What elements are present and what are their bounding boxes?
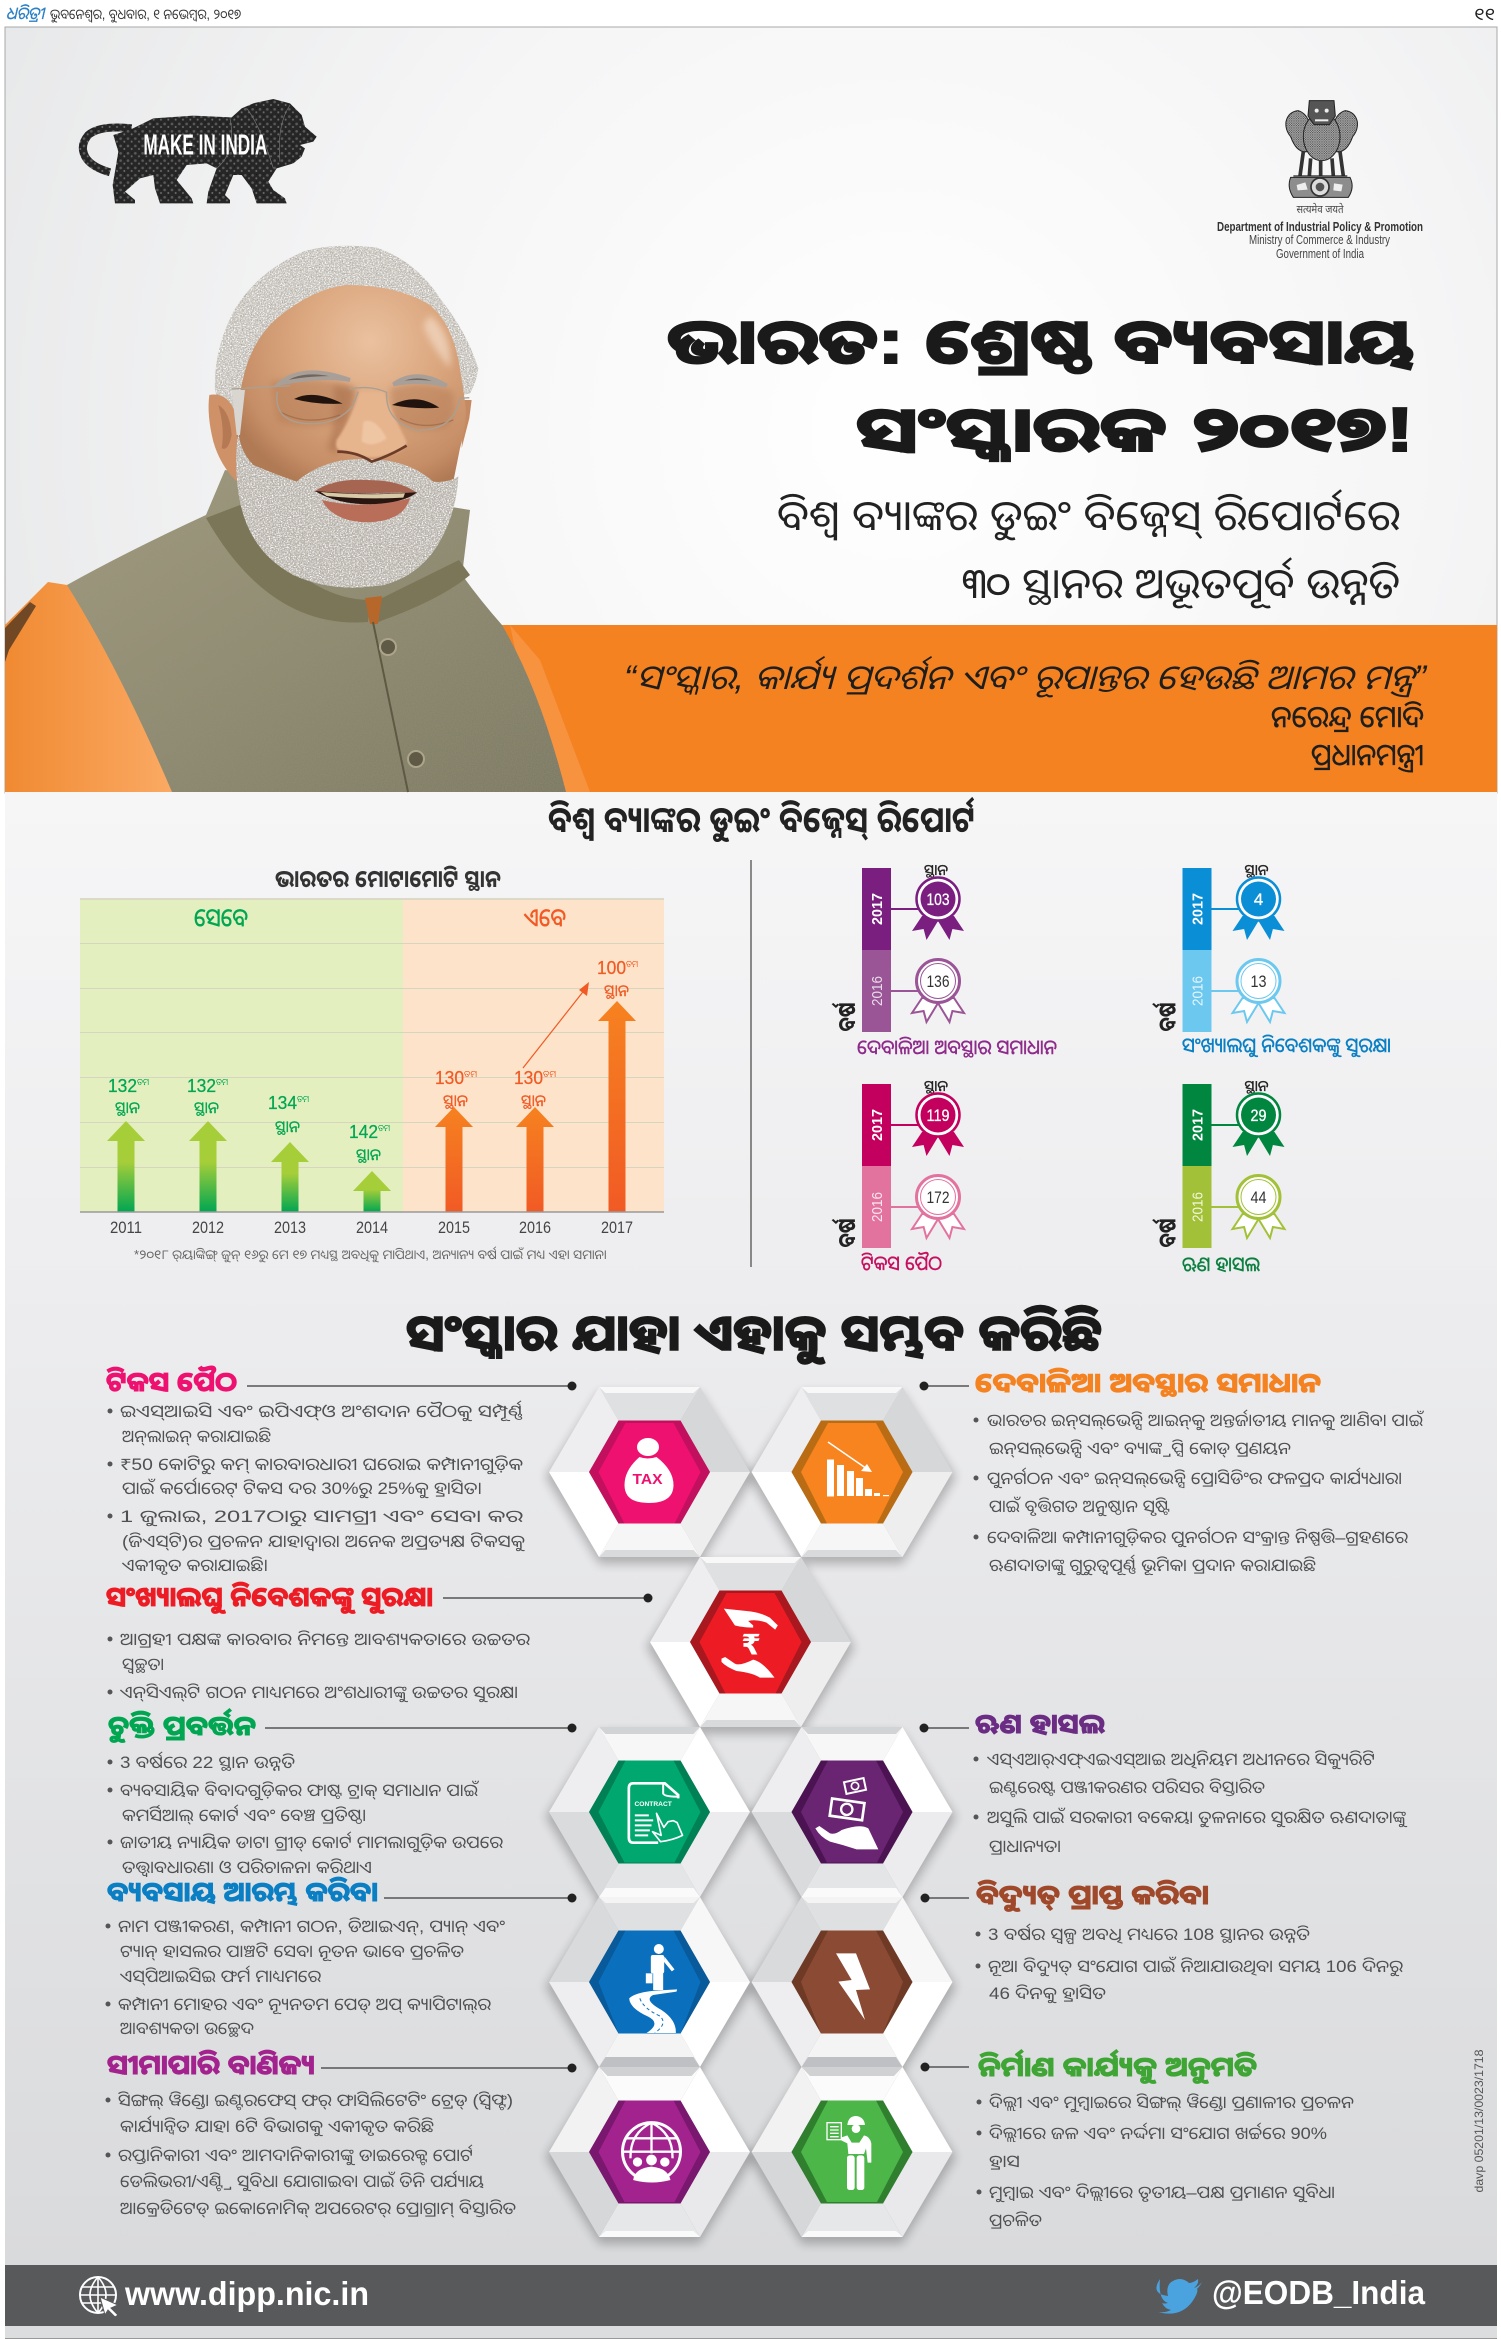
- rank card: resolving insolvency: ସ୍ଥାନ: [924, 862, 948, 879]
- bullet list: ଏକୀକୃତ କରାଯାଇଛି।: [121, 1556, 268, 1576]
- logo: Make in India lion: [83, 99, 317, 203]
- rank card: resolving insolvency: 136: [926, 972, 950, 991]
- centre lion head: [1308, 101, 1335, 125]
- website: www.dipp.nic.in: [124, 2275, 369, 2312]
- rank labels now: ସ୍ଥାନ: [604, 983, 629, 1000]
- page number: ୧୧: [1474, 5, 1495, 24]
- vest placket and buttons: [373, 622, 408, 792]
- orange band background: [495, 625, 1497, 792]
- chart title: ଭାରତର ମୋଟାମୋଟି ସ୍ଥାନ: [275, 865, 501, 893]
- bullet list: ସ୍ୱଚ୍ଛତା: [122, 1655, 164, 1675]
- rank card: resolving insolvency: ବର୍ଷ: [831, 1002, 861, 1032]
- bullet list: ପ୍ରାଧାନ୍ୟତା: [989, 1837, 1061, 1856]
- dateline: ଭୁବନେଶ୍ୱର, ବୁଧବାର, ୧ ନଭେମ୍ବର, ୨୦୧୭: [50, 6, 241, 23]
- bullet list: କମର୍ସିଆଲ୍ କୋର୍ଟ ଏବଂ ବେଞ୍ଚ ପ୍ରତିଷ୍ଠା: [122, 1804, 366, 1825]
- section heading: ଦେବାଳିଆ ଅବସ୍ଥାର ସମାଧାନ: [975, 1368, 1321, 1398]
- rank card: protecting minority investors: 13: [1250, 972, 1266, 991]
- section heading: ବିଦ୍ୟୁତ୍ ପ୍ରାପ୍ତ କରିବା: [976, 1880, 1209, 1912]
- chart footnote: *୨୦୧୮ ର୍‍ୟାଙ୍କିଙ୍ଗ୍ ଜୁନ୍ ୧୬ରୁ ମେ ୧୭ ମଧ୍ୟସ୍ଥ ଅବଧିକୁ ମାପିଥାଏ, ଅନ୍ୟାନ୍ୟ ବର୍ଷ ପାଇଁ ମଧ୍ୟ ଏହା ସମାନ।: [134, 1246, 607, 1262]
- bullet list: [108, 1751, 503, 1878]
- bullet list: ମୁମ୍ବାଇ ଏବଂ ଦିଲ୍ଲୀରେ ତୃତୀୟ–ପକ୍ଷ ପ୍ରମାଣନ ସୁବିଧା: [989, 2183, 1335, 2203]
- rank labels now: 100: [597, 958, 626, 978]
- heading: reforms that made this possible: ସଂସ୍କାର ଯାହା ଏହାକୁ ସମ୍ଭବ କରିଛି: [406, 1305, 1102, 1364]
- bullet list: ପୁନର୍ଗଠନ ଏବଂ ଇନ୍‌ସଲ୍‌ଭେନ୍ସି ପ୍ରୋସିଡିଂର ଫଳପ୍ରଦ କାର୍ଯ୍ୟଧାରା: [987, 1467, 1402, 1489]
- ministry name: Ministry of Commerce & Industry: [1249, 232, 1390, 247]
- divider: [750, 860, 752, 1267]
- section heading: ସୀମାପାରି ବାଣିଜ୍ୟ: [107, 2050, 315, 2080]
- rank labels then: ତମ: [297, 1094, 309, 1104]
- bullet list: ଇନ୍‌ସଲ୍‌ଭେନ୍ସି ଏବଂ ବ୍ୟାଙ୍କ୍ରପ୍ସି କୋଡ୍ ପ୍ରଣୟନ: [989, 1439, 1291, 1459]
- hexagon icon: globe and people: [549, 2067, 750, 2237]
- arrow 2012: [189, 1121, 227, 1212]
- bullet list: [106, 2091, 516, 2218]
- rank labels then: ତମ: [378, 1123, 390, 1133]
- bullet list: ଋଣଦାତାଙ୍କୁ ଗୁରୁତ୍ୱପୂର୍ଣ୍ଣ ଭୂମିକା ପ୍ରଦାନ କରାଯାଇଛି: [989, 1554, 1316, 1576]
- rank card: paying taxes: ଟିକସ ପୈଠ: [861, 1252, 942, 1275]
- ear: [209, 395, 240, 482]
- bullet list: ପ୍ରଚଳିତ: [989, 2211, 1042, 2230]
- bullet list: 3 ବର୍ଷରେ 22 ସ୍ଥାନ ଉନ୍ନତି: [120, 1751, 295, 1772]
- rank labels then: ସ୍ଥାନ: [275, 1119, 300, 1136]
- rank labels then: [108, 1076, 390, 1164]
- icon: twitter bird: [1156, 2279, 1202, 2314]
- hexagon icon: construction worker: [752, 2067, 952, 2237]
- emblem motto: सत्यमेव जयते: [1296, 203, 1344, 216]
- lips and teeth: [314, 480, 417, 493]
- arrow 2011: [107, 1121, 145, 1212]
- bullet list: [108, 1400, 525, 1576]
- year axis labels: 2014: [356, 1219, 388, 1237]
- then panel: [80, 898, 403, 1212]
- bullet list: ସିଙ୍ଗଲ୍ ୱିଣ୍ଡୋ ଇଣ୍ଟରଫେସ୍ ଫର୍ ଫାସିଲିଟେଟିଂ ଟ୍ରେଡ୍ (ସ୍ୱିଫ୍ଟ): [118, 2091, 513, 2111]
- rank card: protecting minority investors: ସଂଖ୍ୟାଲଘୁ ନିବେଶକଙ୍କୁ ସୁରକ୍ଷା: [1182, 1034, 1391, 1057]
- now panel: [403, 898, 664, 1212]
- rank card: resolving insolvency: [831, 862, 1057, 1059]
- hexagon icon: falling bar chart: [752, 1387, 952, 1557]
- bullet list: ଇଏସ୍‌ଆଇସି ଏବଂ ଇପିଏଫ୍‌ଓ ଅଂଶଦାନ ପୈଠକୁ ସମ୍ପୂର୍ଣ୍ଣ: [120, 1400, 523, 1422]
- rank labels now: ସ୍ଥାନ: [521, 1093, 546, 1110]
- bullet list: ଅସୁଲି ପାଇଁ ସରକାରୀ ବକେୟା ତୁଳନାରେ ସୁରକ୍ଷିତ ଋଣଦାତାଙ୍କୁ: [987, 1807, 1408, 1828]
- rank labels now: ସ୍ଥାନ: [443, 1093, 468, 1110]
- vest collar: [206, 505, 370, 623]
- rank labels then: 142: [349, 1122, 378, 1142]
- speaker role: ପ୍ରଧାନମନ୍ତ୍ରୀ: [1311, 739, 1424, 773]
- bullet list: ପାଇଁ ବୃତ୍ତିଗତ ଅନୁଷ୍ଠାନ ସୃଷ୍ଟି: [989, 1496, 1170, 1517]
- rank card: protecting minority investors: 2016: [1190, 976, 1206, 1006]
- logo: Make in India lion: MAKE IN INDIA: [143, 129, 267, 161]
- rank card: paying taxes: [831, 1078, 964, 1275]
- side lion right: [1334, 111, 1357, 152]
- rank labels then: ସ୍ଥାନ: [194, 1100, 219, 1117]
- arrow 2015: [435, 1107, 473, 1212]
- department name: Department of Industrial Policy & Promotion: [1217, 219, 1423, 234]
- hexagon shadows: [546, 1392, 956, 2244]
- rank labels now: ତମ: [543, 1069, 556, 1079]
- hexagon icon: tax bag: TAX: [632, 1471, 662, 1488]
- year axis labels: [110, 1219, 633, 1237]
- rank card: paying taxes: 2016: [869, 1192, 886, 1222]
- bullet list: ଆଗ୍ରହୀ ପକ୍ଷଙ୍କ କାରବାର ନିମନ୍ତେ ଆବଶ୍ୟକତାରେ ଉଚ୍ଚତର: [120, 1630, 530, 1649]
- government name: Government of India: [1276, 246, 1365, 261]
- year axis labels: 2015: [438, 1219, 470, 1237]
- legs: [1300, 152, 1343, 176]
- section heading: ଚୁକ୍ତି ପ୍ରବର୍ତ୍ତନ: [108, 1708, 256, 1743]
- year axis labels: 2016: [519, 1219, 551, 1237]
- hexagon icon: contract: [549, 1727, 750, 1897]
- rank card: getting credit: 29: [1250, 1106, 1266, 1125]
- side lion left: [1286, 111, 1309, 152]
- eyes: [294, 395, 343, 404]
- arrow 2013: [271, 1142, 309, 1212]
- rank labels then: 132: [108, 1076, 137, 1096]
- then label: ସେବେ: [194, 904, 248, 932]
- rank card: getting credit: 2017: [1190, 1109, 1206, 1141]
- bullet list: [106, 1917, 505, 2038]
- rank card: protecting minority investors: [1152, 862, 1391, 1057]
- rank labels then: 132: [187, 1076, 216, 1096]
- rank labels now: ତମ: [626, 959, 638, 969]
- ad code: davp 05201/13/0023/1718: [1472, 2049, 1486, 2192]
- now label: ଏବେ: [523, 904, 566, 932]
- bullet list: [108, 1630, 530, 1703]
- bullet list: ଅନ୍‌ଲାଇନ୍ କରାଯାଇଛି: [122, 1427, 271, 1446]
- reform text: enforcing contracts: [108, 1708, 576, 1878]
- rank card: getting credit: 44: [1250, 1188, 1266, 1207]
- newspaper header strip: [6, 4, 1495, 24]
- bullet list: ବ୍ୟବସାୟିକ ବିବାଦଗୁଡ଼ିକର ଫାଷ୍ଟ ଟ୍ରାକ୍ ସମାଧାନ ପାଇଁ: [120, 1780, 480, 1801]
- rank labels then: ସ୍ଥାନ: [356, 1147, 381, 1164]
- hair: [215, 246, 478, 442]
- reform text: resolving insolvency: [920, 1368, 1425, 1576]
- title line one: ଭାରତ: ଶ୍ରେଷ୍ଠ ବ୍ୟବସାୟ: [667, 308, 1414, 377]
- logo: national emblem: [1286, 101, 1357, 197]
- orange quote band text: [624, 655, 1428, 773]
- hexagon icon: lightning bolt: [752, 1897, 952, 2067]
- eyebrows: [280, 372, 350, 383]
- bullet list: ନୂଆ ବିଦ୍ୟୁତ୍ ସଂଯୋଗ ପାଇଁ ନିଆଯାଉଥିବା ସମୟ 106 ଦିନରୁ: [988, 1956, 1403, 1977]
- right ear sliver: [462, 400, 472, 448]
- hexagon icon: money over hand: [752, 1727, 952, 1897]
- reform text: starting a business: [106, 1877, 576, 2038]
- twitter handle: @EODB_India: [1212, 2274, 1426, 2311]
- beard: [236, 432, 458, 588]
- rank card: paying taxes: 2017: [869, 1109, 886, 1141]
- heading: World Bank Doing Business Report: ବିଶ୍ୱ ବ୍ୟାଙ୍କର ଡୁଇଂ ବିଜ୍ନେସ୍ ରିପୋର୍ଟ: [548, 796, 975, 842]
- reform text: paying taxes: [106, 1365, 576, 1576]
- rank labels then: ତମ: [216, 1077, 228, 1087]
- bullet list: କମ୍ପାନୀ ମୋହର ଏବଂ ନ୍ୟୂନତମ ପେଡ୍ ଅପ୍ କ୍ୟାପିଟାଲ୍‌ର: [118, 1995, 491, 2015]
- arrow 2016: [516, 1107, 554, 1212]
- trend arrow: [523, 982, 589, 1068]
- hexagon icon: hands protecting rupee: ₹: [741, 1628, 761, 1661]
- bullet list: ଇଣ୍ଟରେଷ୍ଟ ପଞ୍ଜୀକରଣର ପରିସର ବିସ୍ତାରିତ: [989, 1778, 1265, 1797]
- subtitle line two: ୩୦ ସ୍ଥାନର ଅଭୂତପୂର୍ବ ଉନ୍ନତି: [962, 557, 1400, 609]
- rank card: protecting minority investors: 2017: [1190, 893, 1206, 925]
- bullet list: [974, 1750, 1408, 1856]
- glasses: [232, 386, 469, 430]
- rank card: getting credit: 2016: [1190, 1192, 1206, 1222]
- rank card: paying taxes: ସ୍ଥାନ: [924, 1078, 948, 1095]
- icon: globe with cursor: [80, 2277, 118, 2317]
- bullet list: ଜାତୀୟ ନ୍ୟାୟିକ ଡାଟା ଗ୍ରୀଡ୍ କୋର୍ଟ ମାମଲାଗୁଡ଼ିକ ଉପରେ: [120, 1831, 503, 1853]
- bullet list: 1 ଜୁଲାଇ, 2017ଠାରୁ ସାମଗ୍ରୀ ଏବଂ ସେବା କର: [120, 1507, 523, 1527]
- subtitle: [777, 489, 1400, 609]
- rank card: paying taxes: 119: [926, 1106, 950, 1125]
- hexagon icon: businessman on road: [549, 1897, 750, 2067]
- rank card: getting credit: ସ୍ଥାନ: [1244, 1078, 1269, 1095]
- arrow 2017: [598, 1001, 636, 1212]
- rank card: resolving insolvency: 2017: [869, 893, 886, 925]
- year axis labels: 2012: [192, 1219, 224, 1237]
- rank labels then: ସ୍ଥାନ: [115, 1100, 140, 1117]
- rank card: protecting minority investors: ସ୍ଥାନ: [1244, 862, 1269, 879]
- bullet list: [976, 1923, 1403, 2004]
- reform text: getting electricity: [920, 1880, 1403, 2004]
- rank card: resolving insolvency: ଦେବାଳିଆ ଅବସ୍ଥାର ସମାଧାନ: [857, 1036, 1057, 1059]
- bullet list: ହ୍ରାସ: [989, 2152, 1020, 2171]
- rank card: getting credit: [1152, 1078, 1284, 1276]
- year axis labels: 2011: [110, 1219, 142, 1237]
- rank labels now: ତମ: [464, 1069, 477, 1079]
- title line two: ସଂସ୍କାରକ ୨୦୧୭!: [856, 396, 1414, 465]
- lower panel background: [5, 792, 1497, 2266]
- section heading: ଟିକସ ପୈଠ: [106, 1365, 237, 1397]
- bullet list: ଏସ୍‌ଏଆର୍‌ଏଫ୍‌ଏଇଏସ୍‌ଆଇ ଅଧିନିୟମ ଅଧୀନରେ ସିକ୍ୟୁରିଟି: [986, 1750, 1375, 1770]
- main title: [667, 308, 1414, 465]
- bullet list: ଦିଲ୍ଲୀରେ ଜଳ ଏବଂ ନର୍ଦ୍ଦମା ସଂଯୋଗ ଖର୍ଚ୍ଚରେ 90%: [989, 2122, 1327, 2143]
- hexagon icon: hands protecting rupee: [650, 1557, 851, 1727]
- top hero panel background: [5, 27, 1497, 793]
- rank card: paying taxes: 172: [926, 1188, 950, 1207]
- rank labels now: 130: [435, 1068, 464, 1088]
- bullet list: ଏସ୍‌ପିଆଇସିଇ ଫର୍ମ ମାଧ୍ୟମରେ: [119, 1965, 321, 1986]
- rank card: resolving insolvency: 103: [926, 890, 950, 909]
- rank card: getting credit: ଋଣ ହାସଲ: [1182, 1254, 1260, 1276]
- rank labels then: 134: [268, 1093, 297, 1113]
- bullet list: ପାଇଁ କର୍ପୋରେଟ୍ ଟିକସ ଦର 30%ରୁ 25%କୁ ହ୍ରାସିତ।: [122, 1477, 482, 1499]
- bullet list: ଏନ୍‌ସିଏଲ୍‌ଟି ଗଠନ ମାଧ୍ୟମରେ ଅଂଶଧାରୀଙ୍କୁ ଉଚ୍ଚତର ସୁରକ୍ଷା: [119, 1683, 518, 1703]
- portrait of the prime minister: [5, 246, 590, 792]
- rank card: protecting minority investors: 4: [1254, 890, 1263, 909]
- face shading: [270, 379, 352, 427]
- ministry credit text block: [1217, 219, 1423, 261]
- footer band: [5, 2265, 1497, 2338]
- rank labels then: ତମ: [137, 1077, 149, 1087]
- abacus base: [1289, 177, 1352, 197]
- bullet list: 3 ବର୍ଷର ସ୍ୱଳ୍ପ ଅବଧି ମଧ୍ୟରେ 108 ସ୍ଥାନର ଉନ୍ନତି: [988, 1923, 1310, 1945]
- rank card: getting credit: ବର୍ଷ: [1152, 1218, 1182, 1248]
- bullet list: [974, 1409, 1425, 1576]
- bullet list: କାର୍ଯ୍ୟାନ୍ୱିତ ଯାହା 6ଟି ବିଭାଗକୁ ଏକୀକୃତ କରିଛି: [120, 2115, 434, 2137]
- bullet list: ନାମ ପଞ୍ଜୀକରଣ, କମ୍ପାନୀ ଗଠନ, ଡିଆଇଏନ୍, ପ୍ୟାନ୍ ଏବଂ: [118, 1917, 505, 1936]
- bullet list: ଦେବାଳିଆ କମ୍ପାନୀଗୁଡ଼ିକର ପୁନର୍ଗଠନ ସଂକ୍ରାନ୍ତ ନିଷ୍ପତ୍ତି–ଗ୍ରହଣରେ: [987, 1526, 1408, 1548]
- bullet list: ଆବଶ୍ୟକତା ଉଚ୍ଛେଦ: [120, 2019, 254, 2038]
- centre lion mane: [1303, 113, 1340, 161]
- year axis labels: 2013: [274, 1219, 306, 1237]
- quote: “ସଂସ୍କାର, କାର୍ଯ୍ୟ ପ୍ରଦର୍ଶନ ଏବଂ ରୂପାନ୍ତର ହେଉଛି ଆମର ମନ୍ତ୍ର”: [624, 655, 1428, 698]
- bullet list: ଦିଲ୍ଲୀ ଏବଂ ମୁମ୍ବାଇରେ ସିଙ୍ଗଲ୍ ୱିଣ୍ଡୋ ପ୍ରଣାଳୀର ପ୍ରଚଳନ: [989, 2093, 1354, 2113]
- chart: India's overall rank: [80, 865, 664, 1262]
- section heading: ନିର୍ମାଣ କାର୍ଯ୍ୟକୁ ଅନୁମତି: [978, 2049, 1257, 2084]
- bullet list: ଆକ୍ରେଡିଟେଡ୍ ଇକୋନୋମିକ୍ ଅପରେଟର୍ ପ୍ରୋଗ୍ରାମ୍ ବିସ୍ତାରିତ: [120, 2199, 516, 2218]
- arrow 2014: [353, 1171, 391, 1212]
- year axis labels: 2017: [601, 1219, 633, 1237]
- orange kurta sleeves: [5, 582, 180, 792]
- sideburn: [232, 390, 245, 435]
- vest: [67, 470, 566, 792]
- subtitle line one: ବିଶ୍ୱ ବ୍ୟାଙ୍କର ଡୁଇଂ ବିଜ୍ନେସ୍ ରିପୋର୍ଟରେ: [777, 489, 1400, 541]
- bullet list: ରପ୍ତାନିକାରୀ ଏବଂ ଆମଦାନିକାରୀଙ୍କୁ ଡାଇରେକ୍ଟ ପୋର୍ଟ: [118, 2144, 473, 2166]
- bullet list: (ଜିଏସ୍‌ଟି)ର ପ୍ରଚଳନ ଯାହାଦ୍ୱାରା ଅନେକ ଅପ୍ରତ୍ୟକ୍ଷ ଟିକସକୁ: [122, 1532, 525, 1552]
- bullet list: [976, 2093, 1354, 2230]
- bullet list: 46 ଦିନକୁ ହ୍ରାସିତ: [989, 1984, 1106, 2004]
- reform text: getting credit: [920, 1709, 1408, 1856]
- newspaper masthead: ଧରିତ୍ରୀ: [6, 4, 46, 23]
- speaker name: ନରେନ୍ଦ୍ର ମୋଦି: [1271, 701, 1424, 734]
- shadow at shoulder: [5, 602, 36, 662]
- rank card: protecting minority investors: ବର୍ଷ: [1152, 1002, 1182, 1032]
- rank labels now: [435, 958, 638, 1110]
- bullet list: ଟ୍ୟାନ୍ ହାସଲର ପାଞ୍ଚଟି ସେବା ନୂତନ ଭାବେ ପ୍ରଚଳିତ: [120, 1942, 464, 1962]
- section heading: ସଂଖ୍ୟାଲଘୁ ନିବେଶକଙ୍କୁ ସୁରକ୍ଷା: [106, 1582, 433, 1614]
- hexagon icon: tax bag: [549, 1387, 750, 1557]
- section heading: ବ୍ୟବସାୟ ଆରମ୍ଭ କରିବା: [107, 1877, 378, 1907]
- nose: [336, 392, 407, 458]
- reform text: construction permits: [920, 2049, 1354, 2230]
- kurta at neck: [365, 596, 382, 624]
- hexagon icon: contract: CONTRACT: [635, 1801, 672, 1808]
- bullet list: ₹50 କୋଟିରୁ କମ୍ କାରବାରଧାରୀ ଘରୋଇ କମ୍ପାନୀଗୁଡ଼ିକ: [120, 1455, 523, 1475]
- bullet list: ଭାରତର ଇନ୍‌ସଲ୍‌ଭେନ୍ସି ଆଇନ୍‌କୁ ଅନ୍ତର୍ଜାତୀୟ ମାନକୁ ଆଣିବା ପାଇଁ: [987, 1409, 1425, 1431]
- section heading: ଋଣ ହାସଲ: [975, 1709, 1105, 1739]
- rank card: resolving insolvency: 2016: [869, 976, 886, 1006]
- bullet list: ଡେଲିଭରୀ/ଏଣ୍ଟ୍ରି ସୁବିଧା ଯୋଗାଇବା ପାଇଁ ତିନି ପର୍ଯ୍ୟାୟ: [120, 2170, 484, 2192]
- rank labels now: 130: [514, 1068, 543, 1088]
- face: [237, 285, 466, 535]
- rank card: paying taxes: ବର୍ଷ: [831, 1218, 861, 1248]
- bullet list: ତତ୍ତ୍ୱାବଧାରଣା ଓ ପରିଚାଳନା କରିଥାଏ: [122, 1858, 372, 1878]
- reform text: protecting minority investors: [106, 1582, 652, 1703]
- reform text: trading across borders: [106, 2050, 576, 2218]
